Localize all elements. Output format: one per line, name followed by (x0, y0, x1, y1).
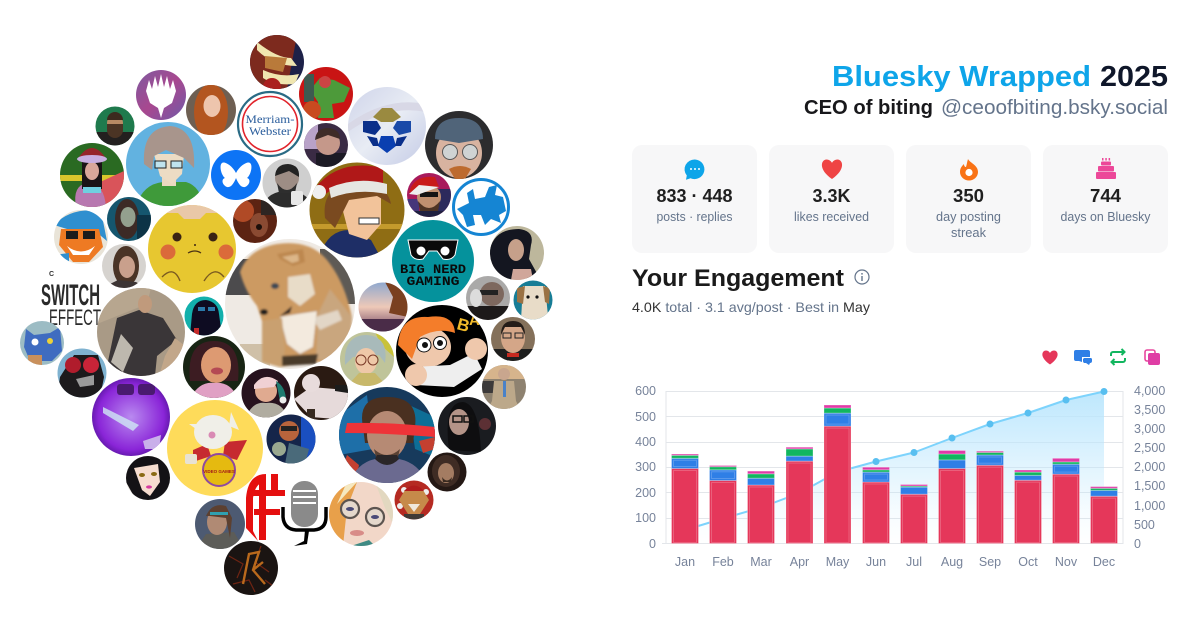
left axis labels: 0 (649, 537, 656, 551)
avatar: anime man with glasses (126, 122, 210, 206)
subtitle: display name and handle (804, 97, 1168, 119)
avatar: microphone (283, 481, 326, 546)
left axis labels (635, 384, 656, 551)
avatar: orange blue cartoon (54, 210, 108, 264)
avatar: shiba puppy (225, 239, 356, 369)
avatar: woman with glasses floral (438, 397, 496, 455)
avatar: man with headset (466, 276, 510, 320)
month labels: Dec (1093, 555, 1115, 569)
month labels: Jun (866, 555, 886, 569)
avatar: switch effect logo: EFFECT (49, 305, 101, 330)
avatar: masked rider (57, 348, 107, 398)
avatar: switch effect logo: SWITCH (41, 279, 100, 312)
right axis labels: 2,000 (1134, 460, 1165, 474)
right axis labels: 500 (1134, 518, 1155, 532)
avatar: BA cartoon on black (396, 305, 488, 397)
stat card: likes: 3.3K (812, 186, 850, 206)
avatar: man hand on chin (304, 123, 348, 167)
avatar: woman black hair (490, 226, 544, 280)
avatar: magic logo (136, 70, 186, 120)
avatar: moogle on yellow (167, 400, 263, 496)
avatar: moogle on yellow: VIDEO GAMES (203, 469, 235, 474)
icon: chat bubble (685, 159, 704, 180)
stat card: likes (769, 145, 894, 253)
month labels (675, 555, 1115, 569)
avatar: bearded santa hat man (407, 173, 451, 217)
right axis labels: 1,500 (1134, 479, 1165, 493)
right axis labels: 2,500 (1134, 441, 1165, 455)
engagement summary: 4.0K total · 3.1 avg/post · Best in May (632, 299, 870, 315)
avatar cluster (20, 35, 553, 595)
avatar: big nerd gaming: GAMING (406, 275, 460, 289)
stat card: likes: likes received (794, 210, 869, 224)
avatar: K ember logo (224, 541, 278, 595)
month labels: Oct (1018, 555, 1038, 569)
stat card: days on Bluesky: 744 (1090, 186, 1121, 206)
icon: info (855, 270, 869, 284)
avatar: pikachu (148, 205, 236, 293)
avatar: space portrait (266, 414, 316, 464)
avatar: santa hat cartoon man (309, 162, 405, 258)
avatar: Christmas woman (60, 143, 124, 207)
stacked bars (672, 405, 1118, 544)
stat card: posting streak (906, 145, 1031, 253)
cumulative line (685, 392, 1104, 530)
avatar: Merriam-Webster (238, 92, 302, 156)
avatar: doll faced woman (183, 336, 245, 398)
title: Bluesky Wrapped (832, 61, 1091, 93)
month labels: Jul (906, 555, 922, 569)
stat card: days on Bluesky: days on Bluesky (1060, 210, 1151, 224)
left axis labels: 400 (635, 435, 656, 449)
avatar: bluesky butterfly (211, 150, 261, 200)
avatar: older man seated (482, 365, 526, 409)
avatar: desert landscape (358, 282, 408, 333)
month labels: May (826, 555, 850, 569)
avatar: blue cat (20, 321, 64, 365)
avatar: woman round glasses (329, 482, 393, 546)
stat card: posts and replies (632, 145, 757, 253)
avatar: big nerd gaming (392, 220, 474, 302)
avatar: FF red logo (246, 474, 285, 541)
right axis labels: 3,000 (1134, 422, 1165, 436)
title: 2025 (1100, 61, 1168, 93)
avatar: europe map (454, 180, 508, 234)
avatar: santa hat guy (241, 368, 291, 418)
left axis labels: 300 (635, 460, 656, 474)
avatar: switch effect logo (41, 271, 101, 330)
stat card: posts and replies: posts · replies (656, 210, 732, 224)
month labels: Nov (1055, 555, 1078, 569)
right axis labels: 4,000 (1134, 384, 1165, 398)
icon: likes (1042, 350, 1058, 364)
month labels: Apr (790, 555, 809, 569)
avatar: anime woman with glasses (340, 332, 394, 386)
avatar: big nerd gaming: BIG NERD (400, 263, 467, 277)
left axis labels: 100 (635, 511, 656, 525)
avatar: man in black t-shirt (97, 288, 185, 376)
icon: replies (1074, 350, 1092, 365)
stat card: days on Bluesky (1043, 145, 1168, 253)
left axis labels: 200 (635, 486, 656, 500)
stat card: posting streak: 350 (953, 186, 984, 206)
avatar: anime girl black hair (126, 456, 170, 500)
avatar: BA cartoon on black: A (469, 312, 480, 329)
left axis labels: 500 (635, 410, 656, 424)
month labels: Mar (750, 555, 772, 569)
avatar: dog on teal (513, 280, 553, 320)
right axis labels (1134, 384, 1165, 551)
left axis labels: 600 (635, 384, 656, 398)
stat card: posting streak: day posting (936, 210, 1001, 224)
right axis labels: 0 (1134, 537, 1141, 551)
line dots (682, 388, 1108, 534)
avatar: mirror selfie (262, 158, 312, 208)
right axis labels: 3,500 (1134, 403, 1165, 417)
cumulative area (685, 392, 1104, 544)
avatar: teal darth figure (184, 296, 224, 336)
avatar: purple lit face (92, 378, 170, 456)
avatar: santa anime portrait (250, 35, 304, 89)
avatar: bearded man green background (95, 106, 135, 146)
avatar: long haired man (427, 452, 467, 492)
month labels: Feb (712, 555, 734, 569)
avatar: Merriam-Webster: Merriam- (246, 114, 295, 126)
avatar: Merriam-Webster: Webster (249, 126, 291, 138)
avatar: switch effect logo: C (49, 271, 54, 278)
stat card: posts and replies: 833 · 448 (656, 186, 732, 206)
month labels: Aug (941, 555, 963, 569)
avatar: blue iridescent logo (348, 87, 426, 165)
avatar: fox on red pattern (394, 480, 434, 520)
avatar: man with glasses and bowtie (491, 317, 535, 361)
subtitle: display name and handle: @ceoofbiting.bsky.social (941, 97, 1168, 119)
icon: quotes (1145, 350, 1160, 365)
avatar: Aloy portrait (195, 499, 245, 549)
avatar: teal lit woman (107, 197, 151, 241)
avatar: armored hero on red (299, 67, 353, 121)
subtitle: display name and handle: CEO of biting (804, 97, 933, 119)
avatar: memoji with beanie (425, 111, 493, 179)
bar inner outlines (674, 415, 1116, 542)
avatar: brown haired woman (102, 244, 146, 288)
icon: birthday cake (1096, 158, 1116, 179)
month labels: Jan (675, 555, 695, 569)
avatar: white cat (294, 366, 348, 420)
stat card: posting streak: streak (951, 226, 987, 240)
right axis labels: 1,000 (1134, 499, 1165, 513)
avatar: dark photo with animal (232, 199, 277, 243)
grid lines (662, 391, 1123, 544)
avatar: red haired woman (186, 85, 236, 135)
month labels: Sep (979, 555, 1001, 569)
icon: heart (822, 160, 842, 179)
icon: flame (960, 159, 978, 180)
legend (1042, 349, 1160, 365)
avatar: man with red censor bar (339, 387, 435, 483)
icon: reposts (1111, 349, 1125, 365)
avatar: BA cartoon on black: B (455, 315, 472, 336)
chart: monthly engagement (635, 384, 1165, 569)
heading: Your Engagement: Your Engagement (632, 265, 844, 292)
